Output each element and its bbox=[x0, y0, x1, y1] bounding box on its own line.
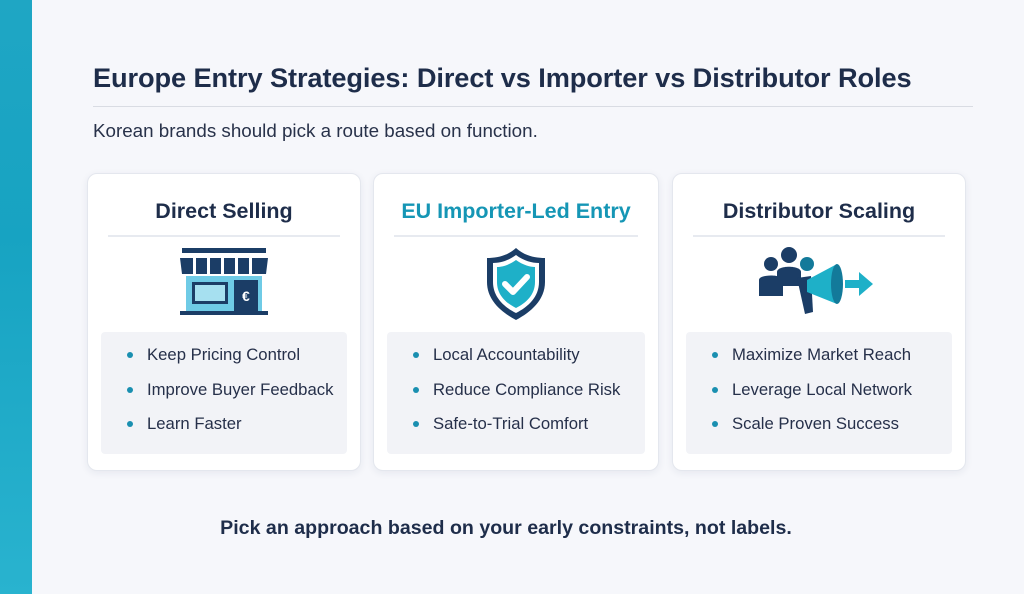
list: distributor benefits bbox=[686, 332, 952, 454]
list: distributor benefits: Leverage Local Network bbox=[732, 380, 912, 398]
list: direct selling benefits: Learn Faster bbox=[147, 414, 242, 433]
list: importer benefits: Safe-to-Trial Comfort bbox=[433, 414, 588, 433]
heading: importer: EU Importer-Led Entry bbox=[401, 199, 631, 223]
list: direct selling benefits bbox=[101, 332, 347, 454]
list: direct selling benefits: Improve Buyer Feedback bbox=[147, 380, 333, 398]
title: Europe Entry Strategies: Direct vs Importer vs Distributor Roles bbox=[93, 62, 912, 93]
icon: storefront bbox=[180, 248, 268, 315]
list: importer benefits: Reduce Compliance Risk bbox=[433, 380, 620, 398]
icon: shield bbox=[487, 248, 545, 320]
heading: direct selling: Direct Selling bbox=[155, 199, 293, 223]
heading: distributor: Distributor Scaling bbox=[723, 199, 915, 223]
list: direct selling benefits: Keep Pricing Control bbox=[147, 345, 300, 364]
list: distributor benefits: Scale Proven Success bbox=[732, 414, 899, 433]
list: importer benefits bbox=[387, 332, 645, 454]
icon: storefront: € bbox=[242, 288, 250, 304]
panel: distributor scaling bbox=[672, 173, 966, 471]
panel: direct selling bbox=[87, 173, 361, 471]
icon: people with megaphone bbox=[759, 247, 873, 314]
list: distributor benefits: Maximize Market Reach bbox=[732, 345, 911, 364]
left accent strip bbox=[0, 0, 32, 594]
subtitle: Korean brands should pick a route based on function. bbox=[93, 120, 538, 141]
panel: importer-led entry bbox=[373, 173, 659, 471]
footer takeaway: Pick an approach based on your early constraints, not labels. bbox=[220, 517, 792, 539]
list: importer benefits: Local Accountability bbox=[433, 345, 580, 364]
